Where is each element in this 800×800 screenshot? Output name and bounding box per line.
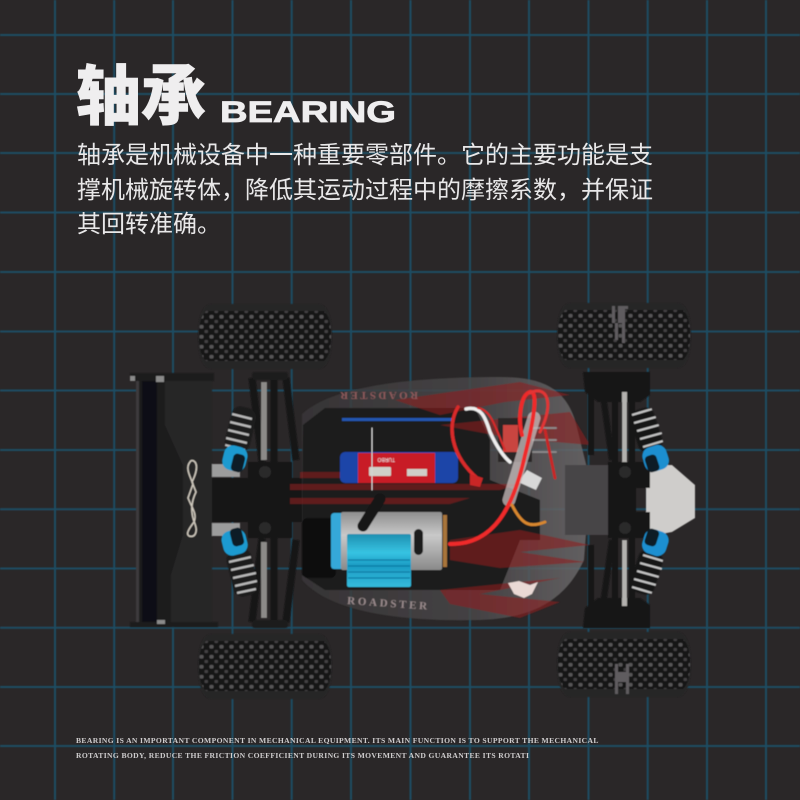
description text: 轴承是机械设备中一种重要零部件。它的主要功能是支	[77, 142, 653, 169]
chassis tub	[302, 408, 540, 590]
rear shock bottom	[219, 527, 260, 598]
front axle assembly	[583, 372, 650, 628]
body lettering bottom: ROADSTER	[347, 595, 428, 613]
electronics and wires	[372, 391, 556, 544]
front bumper	[646, 465, 695, 537]
wheel: rear bottom	[198, 634, 332, 699]
rear wing	[130, 373, 218, 627]
front shock bottom	[628, 527, 671, 597]
title: Chinese: 轴承	[76, 44, 206, 138]
wing clip	[188, 460, 196, 536]
English footnote	[76, 736, 599, 760]
description text: 其回转准确。	[77, 211, 221, 238]
front shock top	[628, 405, 671, 474]
description text	[77, 142, 653, 238]
motor	[302, 499, 447, 587]
wheel: rear top	[198, 304, 332, 369]
wheel: front top	[557, 303, 691, 368]
rear shock top	[220, 405, 258, 474]
antenna mount	[508, 581, 538, 598]
illustration: RC car top view	[130, 303, 695, 699]
wheel: front bottom	[557, 632, 691, 697]
rear axle assembly	[212, 372, 310, 628]
description text: 撑机械旋转体，降低其运动过程中的摩擦系数，并保证	[77, 176, 653, 204]
front gearbox	[565, 465, 630, 535]
title: English: BEARING	[220, 96, 396, 129]
flame decals	[290, 382, 590, 618]
battery: TURBO	[377, 456, 395, 462]
body shell	[302, 377, 590, 620]
English footnote: BEARING IS AN IMPORTANT COMPONENT IN MECHANICAL EQUIPMENT. ITS MAIN FUNCTION IS TO SUPPORT THE MECHANICAL	[76, 736, 599, 745]
English footnote: ROTATING BODY, REDUCE THE FRICTION COEFFICIENT DURING ITS MOVEMENT AND GUARANTEE ITS ROTATI	[76, 751, 529, 760]
body lettering top: ROADSTER	[339, 389, 418, 401]
battery	[340, 418, 458, 483]
